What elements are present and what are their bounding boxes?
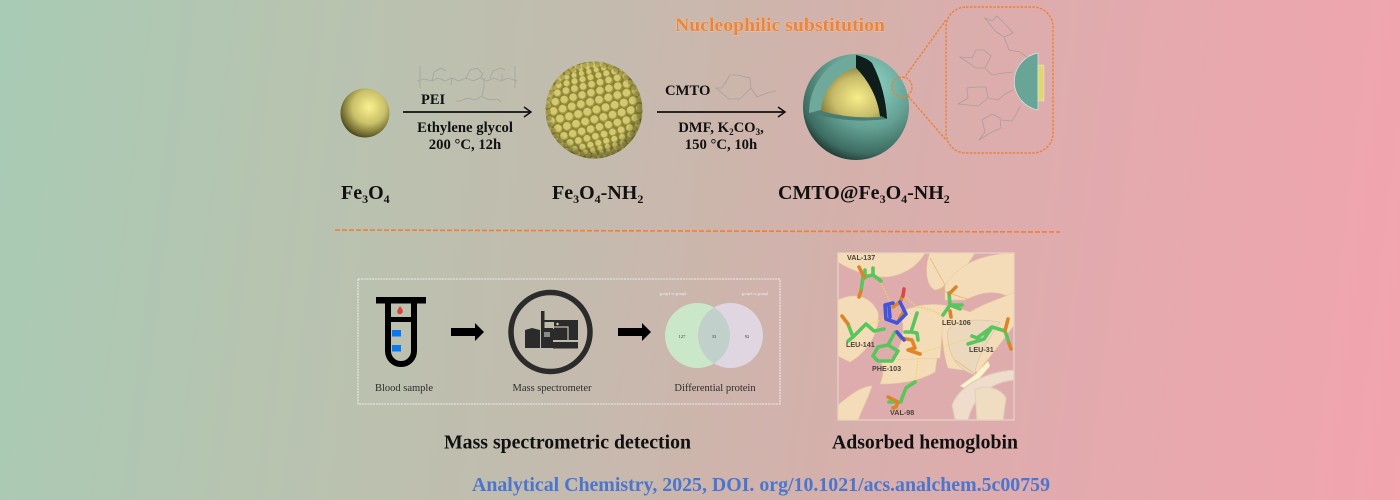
caption: Mass spectrometer: Mass spectrometer: [512, 383, 592, 394]
label: Fe3O4-NH2: 2: [637, 192, 643, 206]
highlight strip: [960, 361, 990, 388]
panel: zoomed surface detail: [946, 7, 1053, 153]
label: CMTO: CMTO: [665, 83, 710, 99]
icon: Fe3O4 sphere: [340, 88, 390, 138]
icon: mass spectrometer: [511, 292, 590, 372]
citation: Analytical Chemistry, 2025, DOI. org/10.1021/acs.analchem.5c00759: [472, 475, 1050, 496]
label: VAL-98: VAL-98: [890, 408, 914, 417]
residue: LEU-31: [968, 319, 1011, 349]
label: Fe3O4-NH2: Fe: [552, 182, 573, 204]
label: Fe3O4-NH2: O: [579, 182, 595, 204]
heading: Adsorbed hemoglobin: Adsorbed hemoglobin: [832, 432, 1018, 454]
label: LEU-31: LEU-31: [969, 345, 994, 354]
label: Fe3O4-NH2: -NH: [601, 182, 638, 204]
reaction step: PEI: [403, 66, 531, 153]
label: CMTO@Fe3O4-NH2: O: [886, 182, 901, 204]
conditions: CMTO temperature and time: 150 °C, 10h: [685, 137, 757, 153]
venn value: right: 92: [745, 334, 749, 339]
protein ribbons: [838, 253, 1014, 420]
label: Fe3O4: Fe: [341, 182, 362, 204]
molecule: CMTO structure: [716, 75, 776, 99]
title: Nucleophilic substitution: Nucleophilic substitution: [675, 15, 885, 36]
zoom callout lens and leader lines: [892, 20, 946, 140]
residue: LEU-106: [943, 287, 962, 317]
caption: Blood sample: Blood sample: [375, 383, 433, 394]
conditions: CMTO step: DMF, K: [678, 120, 729, 136]
icon: shell segment: [1014, 53, 1038, 110]
icon: core segment: [1038, 65, 1044, 101]
venn value: overlap: 33: [712, 334, 717, 339]
residue: LEU-141: [842, 316, 884, 341]
panel: mass spectrometry workflow: [358, 279, 780, 404]
caption: Differential protein: Differential protein: [674, 383, 756, 394]
label: Fe3O4: 3: [362, 192, 368, 206]
arrow: tube to spectrometer: [451, 323, 484, 341]
molecules: CMTO ligands: [958, 16, 1027, 140]
label: LEU-106: LEU-106: [942, 318, 971, 327]
label: CMTO@Fe3O4-NH2: 2: [944, 192, 950, 206]
label: CMTO@Fe3O4-NH2: -NH: [907, 182, 944, 204]
venn heading: right: group3 vs group4: [742, 292, 768, 296]
arrow: CMTO step: [657, 111, 785, 113]
label: PHE-103: PHE-103: [872, 364, 901, 373]
ligand: CMTO molecule: [885, 289, 920, 354]
venn overlap: [698, 308, 730, 364]
label: Fe3O4-NH2: 3: [573, 192, 579, 206]
arrow: PEI step: [403, 111, 531, 113]
icon: Fe3O4-NH2 sphere of packed particles: [546, 62, 642, 158]
residue: VAL-98: [888, 382, 915, 408]
conditions: PEI step: Ethylene glycol: [417, 120, 513, 136]
heading: Mass spectrometric detection: Mass spectrometric detection: [444, 432, 691, 454]
panel: protein docking view: [838, 253, 1014, 420]
residue: near ligand: [905, 313, 918, 340]
molecule: PEI structure: [417, 66, 517, 102]
label: CMTO@Fe3O4-NH2: 3: [880, 192, 886, 206]
icon: blood sample tube: [376, 297, 426, 364]
venn circle: right group: [698, 303, 763, 368]
label: Fe3O4: 4: [384, 192, 390, 206]
residue: VAL-137: [859, 267, 881, 297]
venn heading: left: group1 vs group2: [660, 292, 686, 296]
conditions: CMTO step: 2: [729, 127, 734, 137]
label: VAL-137: VAL-137: [847, 253, 875, 262]
label: CMTO@Fe3O4-NH2: CMTO@Fe: [778, 182, 880, 204]
label: LEU-141: LEU-141: [846, 340, 875, 349]
reaction step: CMTO: [657, 75, 785, 153]
lower ribbon loop: [952, 370, 1014, 420]
arrow: spectrometer to protein: [618, 323, 651, 341]
conditions: CMTO step: ,: [760, 120, 764, 136]
conditions: CMTO step: CO: [734, 120, 756, 136]
venn value: left: 127: [679, 334, 686, 339]
lower ribbon helix: [975, 387, 1006, 420]
venn circle: left group: [665, 303, 730, 368]
label: CMTO@Fe3O4-NH2: 4: [901, 192, 907, 206]
residue: PHE-103: [873, 332, 898, 361]
label: Fe3O4-NH2: 4: [595, 192, 601, 206]
chart: Venn diagram of differential proteins: [660, 292, 768, 368]
label: PEI: PEI: [421, 92, 446, 108]
conditions: CMTO step: 3: [756, 127, 761, 137]
hydrophobic contact dashes: [867, 283, 972, 383]
icon: core-shell CMTO sphere: [803, 54, 909, 160]
conditions: temperature and time: 200 °C, 12h: [429, 137, 501, 153]
label: Fe3O4: O: [368, 182, 384, 204]
